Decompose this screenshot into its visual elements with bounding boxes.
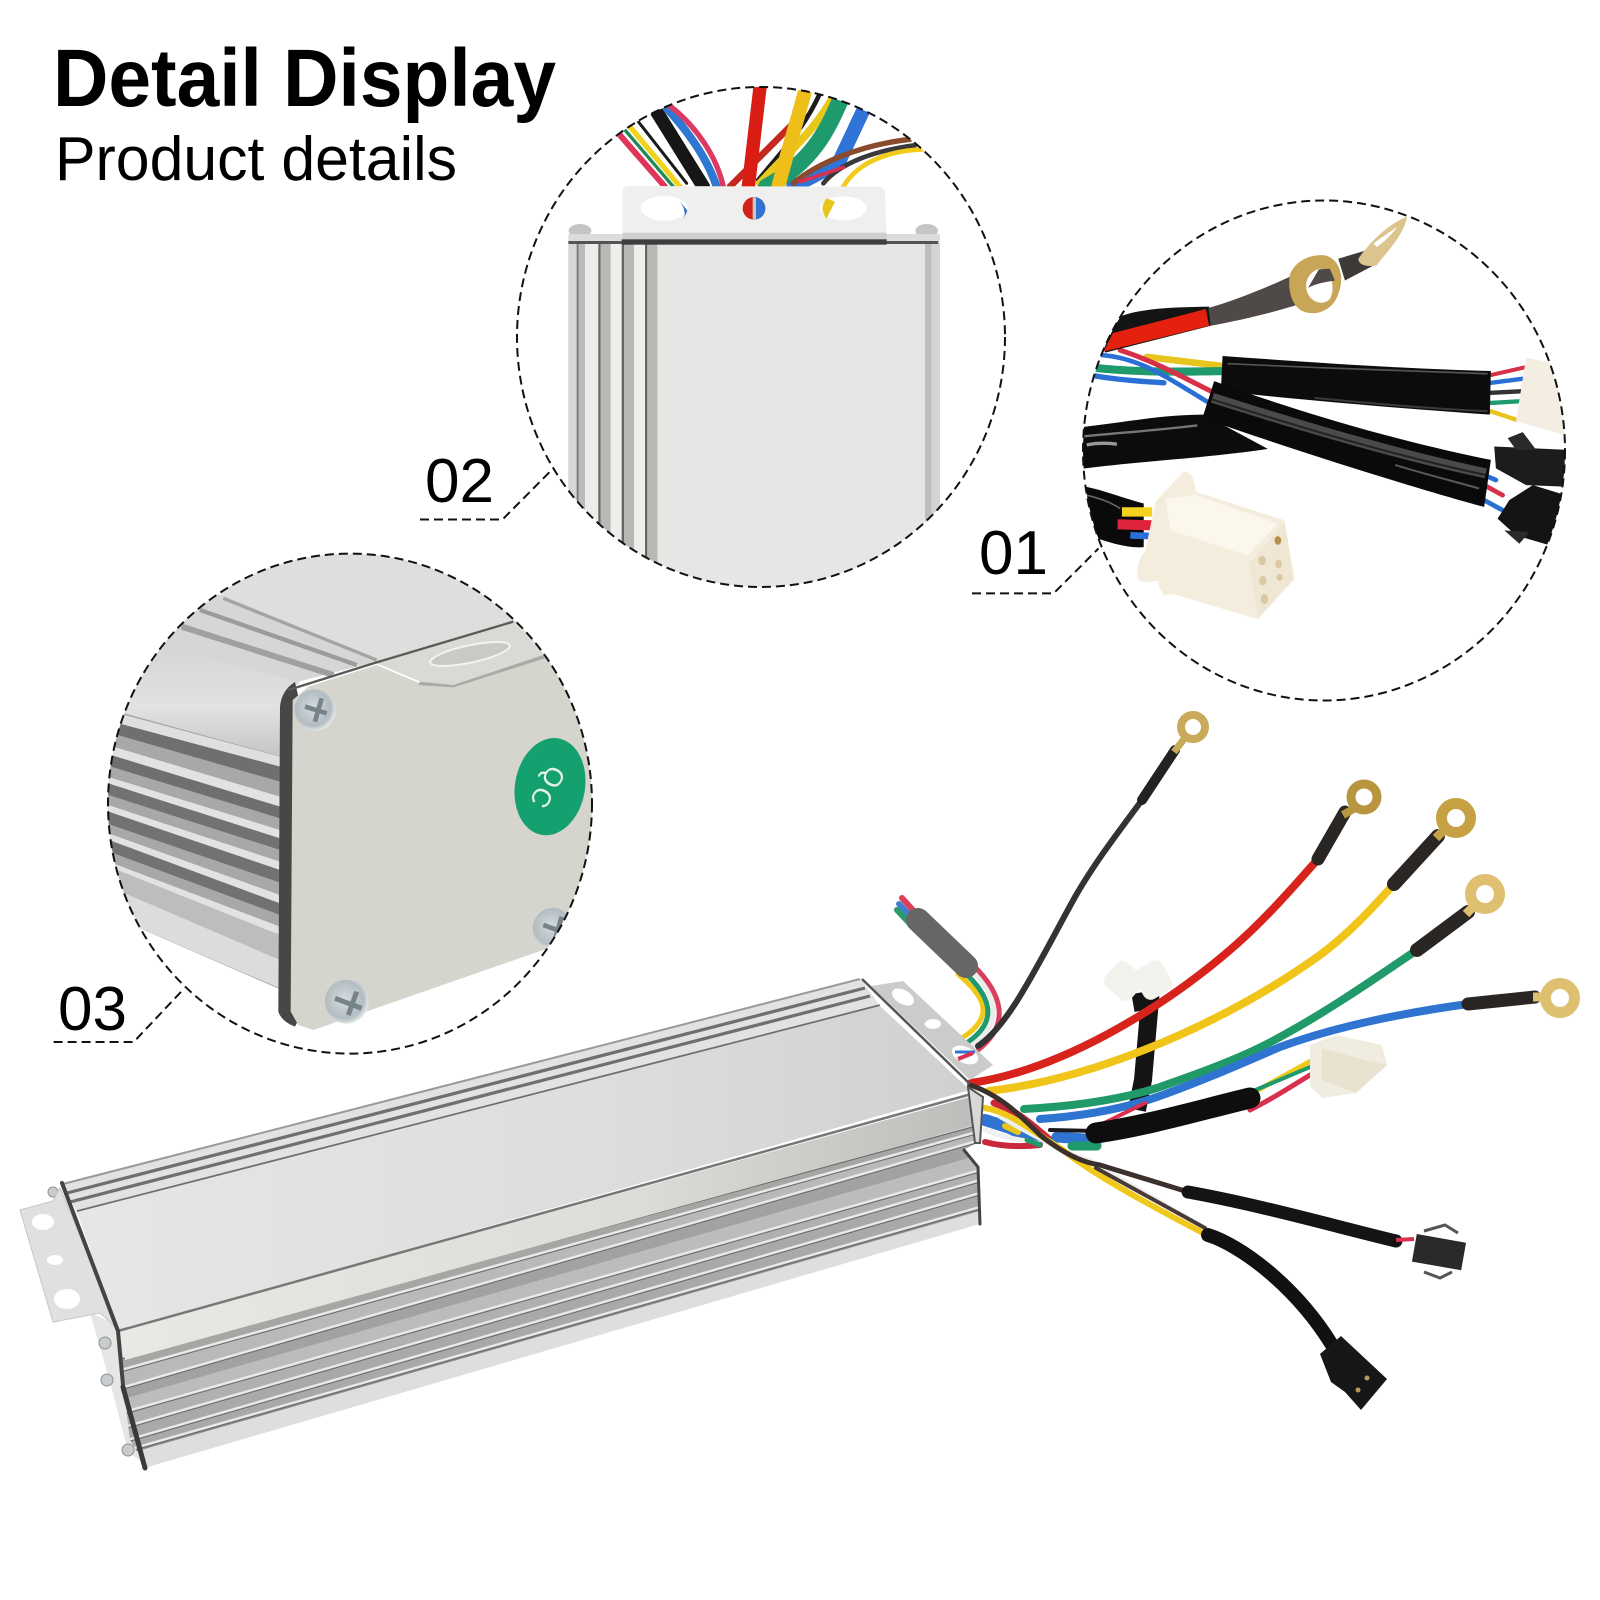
end gaskets [62,1150,980,1468]
wires above bracket [618,82,923,187]
fins side [110,1124,980,1478]
top face [220,554,559,678]
yellow lead with ring terminal [989,804,1470,1091]
right bracket [862,979,993,1084]
photo: controller end plate [97,543,607,1030]
label 03: 03 [58,975,127,1044]
sleeved signal bundle [897,898,999,1050]
body top face and ribs [657,244,925,587]
tube B [1202,381,1491,507]
blue lead with ring terminal [1040,984,1574,1119]
sleeve and plug: upper [1188,1192,1466,1278]
photo: cable harness [1073,217,1576,619]
colored wires [1090,350,1528,510]
mounting bracket [622,186,886,232]
rear mount strip and screws [48,1187,150,1468]
dashed circle 03 [108,554,592,1054]
panel: detail 02 [516,86,1006,588]
panel: detail 03 [97,543,607,1054]
QC sticker [514,738,586,836]
white six-pin connector [1137,472,1295,619]
screw top left [294,689,336,731]
screws [568,224,592,234]
ribs [124,594,376,712]
screw bottom left [325,980,369,1024]
label 01: 01 [979,519,1048,588]
photo: controller top with wires [568,87,940,587]
lower left tube [1086,486,1144,548]
main product: controller with wiring [20,715,1574,1478]
label 02: 02 [425,447,494,516]
gray sleeve and ring terminal [1208,274,1298,326]
bevel strip [120,1097,975,1360]
subtitle: Product details [55,125,457,194]
top face [77,1006,970,1331]
left thick cable [1073,415,1268,470]
white twin connector [1101,957,1175,1110]
screw bottom right [532,908,566,948]
white connector with wires [1240,1035,1387,1110]
title: Detail Display [53,33,556,124]
dashed circle 02 [517,87,1005,587]
ribs on top [62,979,880,1212]
sleeve black right [1096,1098,1250,1133]
black connector [1494,447,1570,487]
gasket [278,682,300,1027]
label 03 [54,975,184,1044]
green lead with ring terminal [1024,880,1500,1109]
fins [97,707,282,990]
sleeve and plug: lower [1208,1235,1387,1410]
left bracket [20,1188,120,1331]
dashed circle 01 [1083,200,1565,700]
tube A [1221,356,1491,415]
label 01 [972,519,1098,593]
QC sticker: QC [522,761,571,816]
wire tangle at controller end [970,1085,1205,1234]
red lead with ring terminal [971,784,1377,1083]
end plate [291,633,607,1030]
black lead with ring terminal [978,715,1205,1046]
bracket [377,654,543,685]
right end strip [968,1087,983,1143]
white connector top right [1516,358,1564,435]
panel: detail 01 [1073,200,1576,700]
label 02 [420,447,554,520]
top red cable [1100,307,1211,353]
